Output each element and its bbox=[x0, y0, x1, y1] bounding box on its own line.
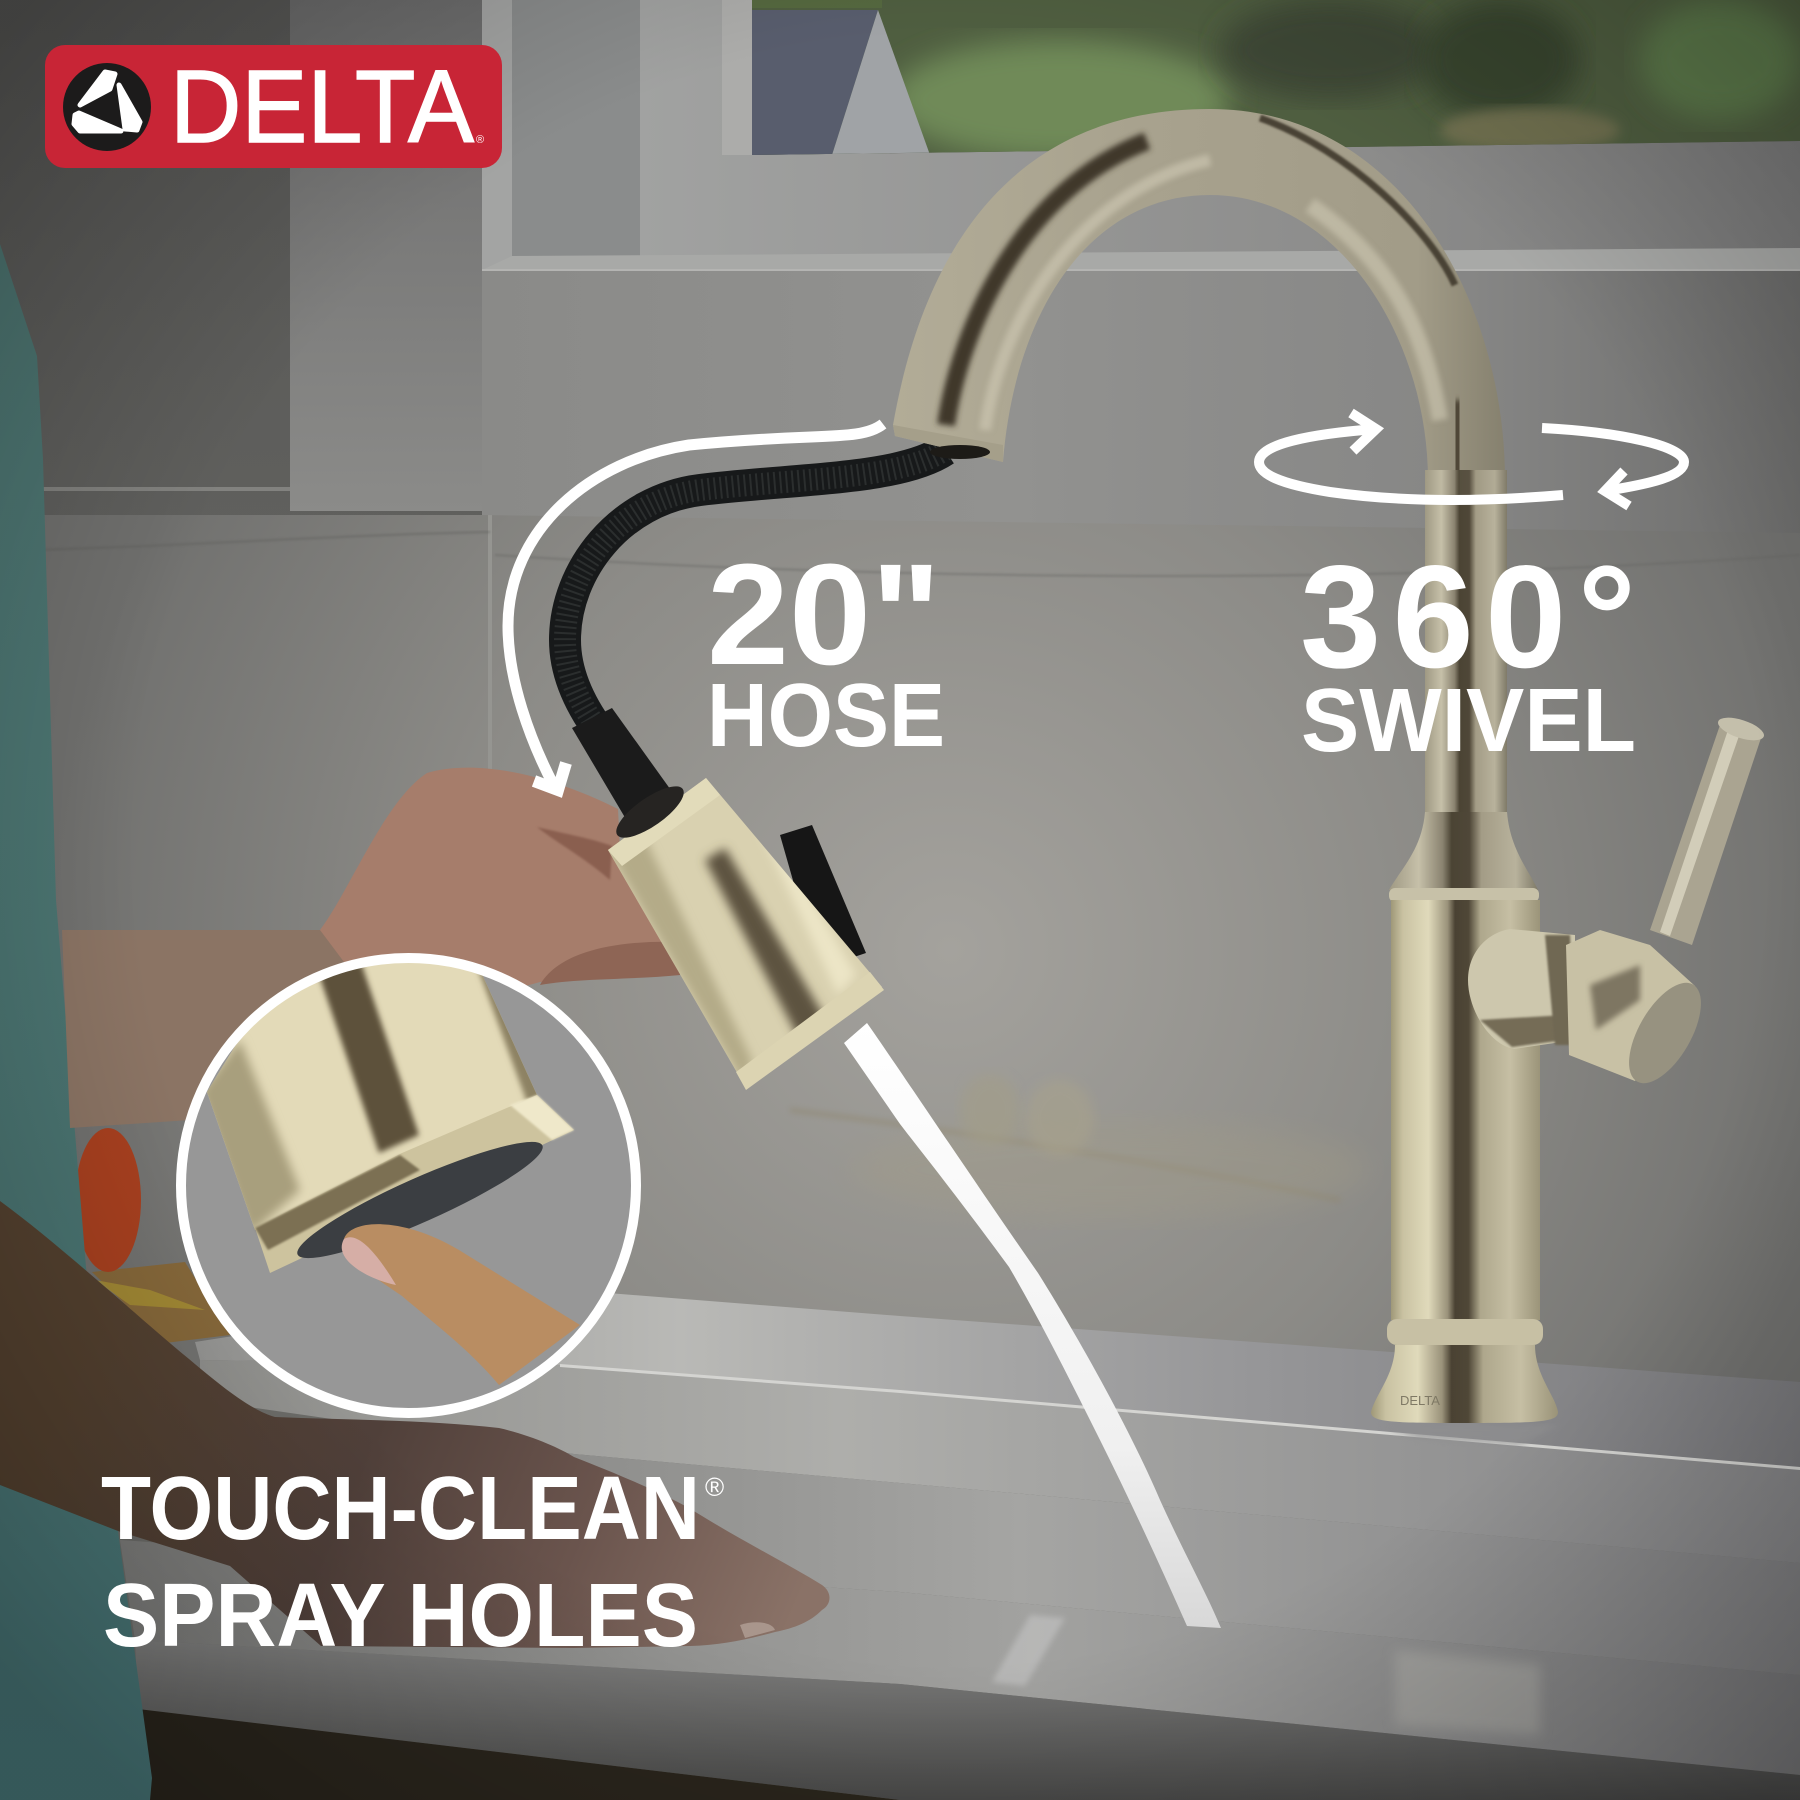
label: touch-clean spray holes: SPRAY HOLES bbox=[103, 1566, 698, 1666]
spray head close-up bbox=[207, 940, 537, 1230]
lower finger bbox=[540, 942, 680, 985]
fingertip bbox=[342, 1224, 580, 1385]
label: touch-clean spray holes: ® bbox=[705, 1472, 724, 1502]
swivel arrows bbox=[1259, 413, 1684, 506]
fingernails bbox=[740, 1622, 775, 1638]
holding arm and hand bbox=[62, 768, 760, 1128]
label: 20 inch hose: 20" bbox=[707, 534, 941, 695]
label: 360 degree swivel: SWIVEL bbox=[1301, 671, 1636, 771]
faucet base engraving: DELTA bbox=[1400, 1393, 1440, 1408]
inset circle: touch-clean detail bbox=[180, 930, 636, 1414]
label: touch-clean spray holes bbox=[101, 1459, 724, 1666]
main faucet bbox=[893, 109, 1558, 1423]
thumbnail bbox=[708, 892, 760, 925]
window view: trees and house bbox=[752, 0, 1800, 160]
lower arm and hand on counter bbox=[0, 1201, 830, 1648]
logo mark bbox=[63, 63, 151, 151]
label: 20 inch hose bbox=[707, 534, 945, 766]
faucet handle bbox=[1468, 713, 1767, 1094]
counter, sink and cabinet bbox=[120, 1285, 1800, 1800]
brand logo bbox=[45, 45, 502, 168]
water stream bbox=[844, 1023, 1221, 1628]
finger crease bbox=[537, 827, 612, 880]
pull-down spray head bbox=[572, 708, 884, 1090]
label: 20 inch hose: HOSE bbox=[707, 666, 945, 766]
hose length arrow bbox=[508, 424, 883, 790]
tomato bbox=[75, 1128, 141, 1272]
logo wordmark: DELTA bbox=[170, 49, 474, 164]
brand logo: ® bbox=[476, 134, 484, 146]
cutting board with cheese bbox=[92, 1262, 230, 1343]
towel bbox=[0, 244, 152, 1800]
label: 360 degree swivel: 360° bbox=[1300, 535, 1636, 698]
label: touch-clean spray holes: TOUCH-CLEAN bbox=[101, 1459, 700, 1559]
label: 360 degree swivel bbox=[1300, 535, 1636, 771]
braided hose bbox=[565, 450, 945, 732]
